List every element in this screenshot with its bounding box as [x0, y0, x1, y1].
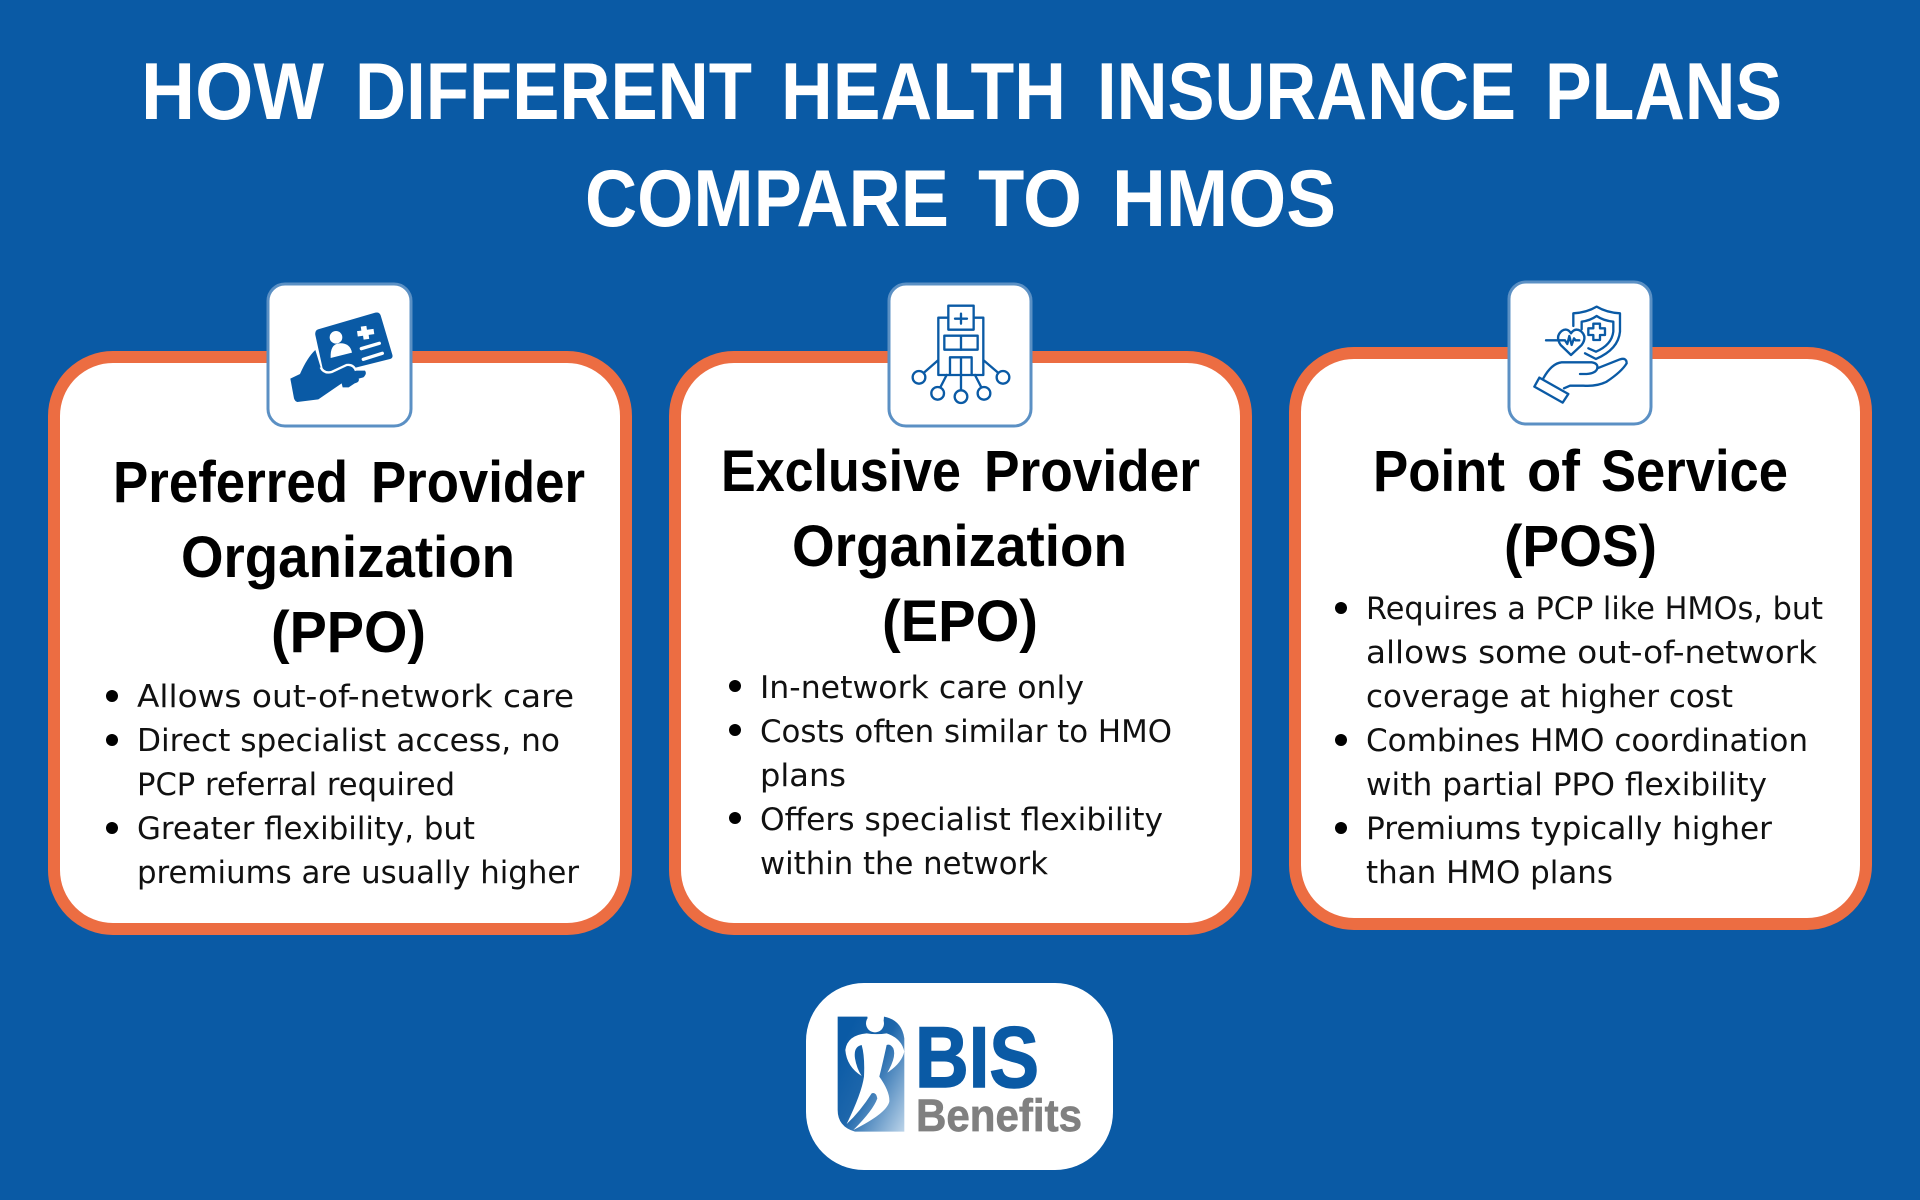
- heading: PPO: (PPO): [271, 600, 426, 665]
- heading: EPO: [721, 439, 1200, 654]
- title: HEALTH: [781, 47, 1066, 137]
- icon: hand with shield and heart: [1509, 282, 1651, 424]
- title: PLANS: [1545, 47, 1782, 137]
- bullet list: EPO: Costs often similar to HMO: [760, 714, 1172, 750]
- logo: BIS Benefits: BIS: [915, 1010, 1039, 1106]
- heading: PPO: [113, 450, 585, 665]
- bullet list: EPO: plans: [760, 758, 846, 794]
- heading: POS: Service: [1601, 439, 1788, 504]
- title: TO: [978, 154, 1082, 244]
- bullet list: EPO: [729, 670, 1172, 882]
- heading: PPO: Preferred: [113, 450, 348, 515]
- title: DIFFERENT: [355, 47, 752, 137]
- heading: EPO: Provider: [984, 439, 1200, 504]
- bullet list: PPO: Greater flexibility, but: [137, 811, 475, 847]
- logo: BIS Benefits: Benefits: [916, 1090, 1082, 1141]
- heading: PPO: Provider: [371, 450, 585, 515]
- bullet list: POS: Combines HMO coordination: [1366, 723, 1808, 759]
- bullet list: POS: allows some out-of-network: [1366, 635, 1817, 671]
- title: INSURANCE: [1097, 47, 1516, 137]
- card frame: POS: [1295, 353, 1866, 924]
- bullet list: EPO: within the network: [760, 846, 1048, 882]
- bullet list: PPO: PCP referral required: [137, 767, 455, 803]
- heading: POS: (POS): [1504, 514, 1657, 579]
- icon: hospital network: [889, 284, 1031, 426]
- panel: EPO: [675, 284, 1246, 929]
- bullet list: EPO: Offers specialist flexibility: [760, 802, 1163, 838]
- panel: POS: [1295, 282, 1866, 924]
- bullet list: POS: Requires a PCP like HMOs, but: [1366, 591, 1823, 627]
- bullet list: POS: Premiums typically higher: [1366, 811, 1772, 847]
- title: HMOS: [1112, 154, 1336, 244]
- bullet list: POS: [1335, 591, 1823, 891]
- bullet list: PPO: Direct specialist access, no: [137, 723, 560, 759]
- bullet list: POS: than HMO plans: [1366, 855, 1613, 891]
- logo: BIS Benefits: [806, 983, 1113, 1170]
- bullet list: POS: coverage at higher cost: [1366, 679, 1733, 715]
- heading: PPO: Organization: [181, 525, 515, 590]
- bullet list: POS: with partial PPO flexibility: [1366, 767, 1767, 803]
- title: HOW: [141, 47, 325, 137]
- heading: EPO: (EPO): [882, 589, 1038, 654]
- icon: runner shield: [838, 1014, 904, 1132]
- heading: POS: Point: [1373, 439, 1505, 504]
- bullet list: PPO: [106, 679, 579, 891]
- heading: POS: [1373, 439, 1788, 579]
- heading: POS: of: [1527, 439, 1581, 504]
- title: [141, 47, 1782, 244]
- panel: PPO: [54, 284, 626, 929]
- heading: EPO: Exclusive: [721, 439, 961, 504]
- card frame: EPO: [675, 357, 1246, 929]
- bullet list: PPO: premiums are usually higher: [137, 855, 579, 891]
- heading: EPO: Organization: [792, 514, 1127, 579]
- bullet list: PPO: Allows out-of-network care: [137, 679, 574, 715]
- icon: hand holding insurance card: [268, 284, 411, 426]
- title: COMPARE: [585, 154, 949, 244]
- bullet list: EPO: In-network care only: [760, 670, 1084, 706]
- card frame: PPO: [54, 357, 626, 929]
